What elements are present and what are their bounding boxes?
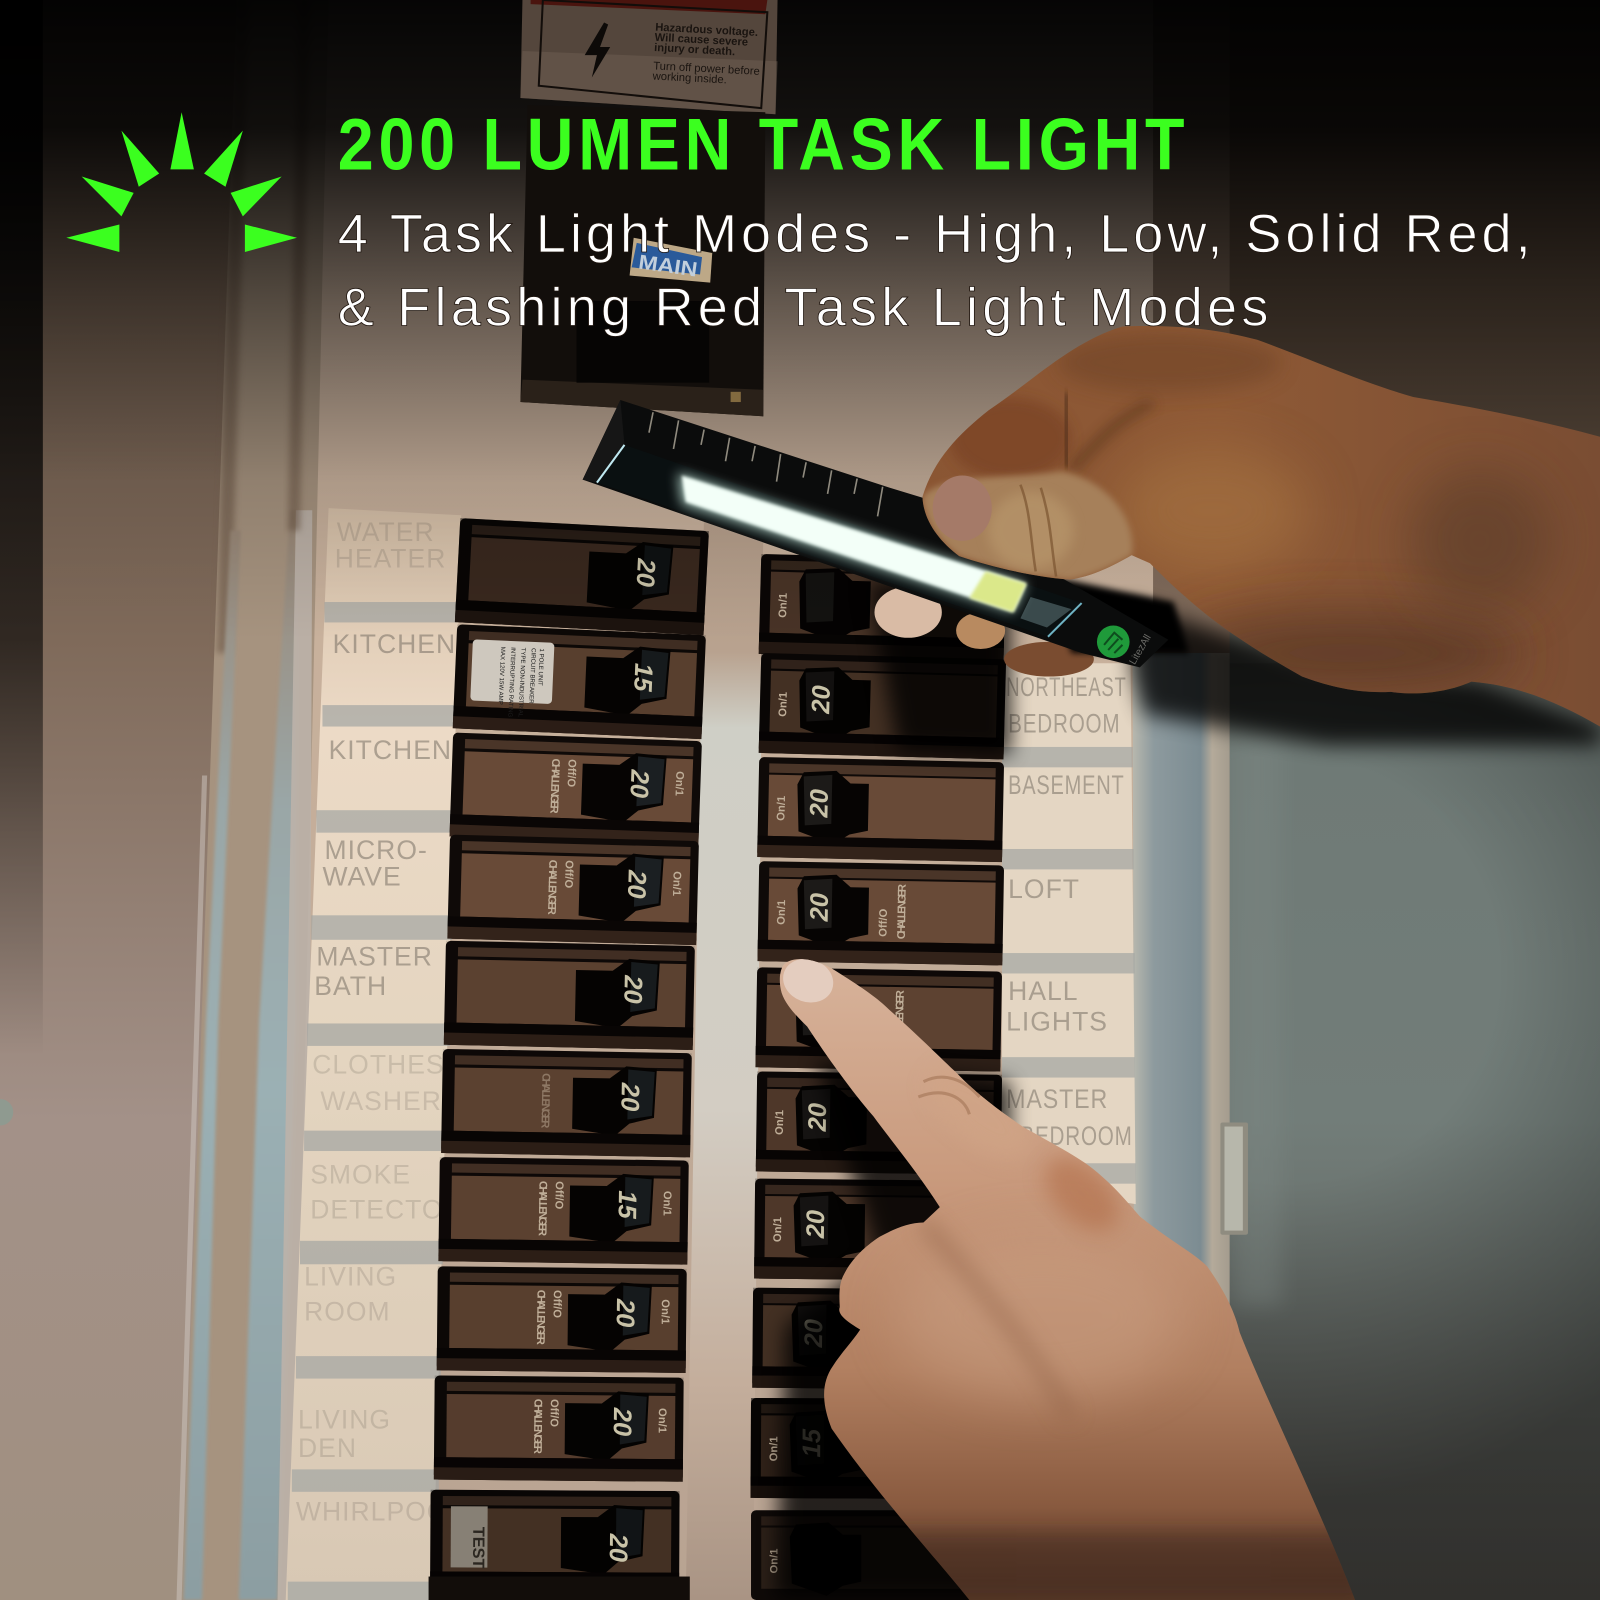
thumb nail [933,476,992,541]
breaker 2: INTERRUPTING RATING [506,647,516,718]
breaker 9: CHALLENGER [531,1399,544,1454]
left breaker column [429,518,709,1600]
breaker 1 [455,518,709,635]
breaker 3: On/1 [673,771,685,796]
left breaker labels: HEATER [335,543,446,573]
breaker 7 [438,1157,689,1265]
palm shadow [1173,610,1520,696]
lens [597,445,1082,637]
flashlight body [583,400,1168,667]
dark groove upper [288,0,310,531]
breaker 2: 1 POLE UNIT [536,648,545,686]
door hinge [1220,1122,1248,1235]
right breaker 8 [752,1288,998,1390]
right breaker 6 [756,1071,1002,1175]
left breaker labels: ROOM [304,1296,391,1326]
yellow end of strip [969,571,1027,612]
left breaker labels: CLOTHES [312,1049,445,1079]
index finger [949,398,1071,480]
LED task light [583,400,1168,667]
warning sign: Turn off power before [653,60,760,78]
right breaker 9: On/1 [768,1436,780,1461]
breaker 8 [437,1266,687,1373]
left breaker labels: WAVE [322,862,402,892]
breaker 7: Off/O [552,1181,565,1210]
breaker 9 [434,1375,684,1482]
left breaker labels: WATER [337,517,435,547]
left breaker labels [286,508,482,1600]
right breaker 7: On/1 [772,1217,784,1242]
thumb [922,471,1132,580]
thumb creases [1020,485,1056,577]
blue highlight strip A [184,531,241,1600]
right breaker 2 [759,653,1006,759]
icon: light burst [66,112,297,252]
breaker 9: Off/O [548,1399,560,1427]
lens reflection [1020,597,1071,628]
breaker 6 [441,1049,692,1157]
breaker 3: 20 [625,768,654,798]
pointing hand [776,949,1367,1600]
right breaker 2: 20 [807,685,836,715]
right breaker 7 [754,1179,1000,1281]
breaker 10 [430,1490,680,1595]
right breaker 5 [755,967,1002,1072]
warning sign [520,0,778,114]
breaker 2: MAX 120V 15W AMP [497,647,506,705]
breaker 4: Off/O [562,860,575,889]
right breaker 3: On/1 [775,796,788,821]
right breaker 4 [757,861,1004,965]
gold speck [731,392,741,402]
left breaker labels: WASHER [320,1086,442,1116]
finger crease [1065,393,1067,467]
breaker 8: Off/O [551,1290,563,1318]
back-of-hand highlight [1124,454,1302,566]
wall screw [0,1099,13,1126]
left breaker labels: WHIRLPOOL [296,1496,464,1526]
breaker 8: 20 [611,1298,639,1327]
right breaker 3: 20 [805,789,834,819]
breaker 4 [447,835,699,945]
breaker 9: 20 [608,1407,636,1436]
breaker 3 [450,733,702,845]
left breaker labels: DETECTORS [310,1194,482,1224]
right breaker column [751,554,1006,1600]
right trim edge [278,510,312,1600]
breaker 7: On/1 [661,1191,673,1216]
right breaker labels: LIGHTS [1006,1007,1108,1037]
left wall margin shadow [0,0,43,1600]
breaker 6: 20 [615,1082,644,1111]
right breaker labels: BEDROOM [1020,1121,1133,1151]
breaker 5 [444,941,695,1050]
breaker 4: On/1 [670,871,683,896]
left breaker labels: MASTER [316,941,433,971]
right breaker 6: On/1 [774,1110,786,1135]
light glow [678,472,1027,612]
subtitle [338,204,1531,338]
breaker 7: CHALLENGER [536,1181,549,1236]
main label plate [630,238,712,283]
thumb highlight [988,492,1073,569]
breaker 10: TEST [469,1527,487,1569]
right breaker 10: On/1 [769,1549,781,1573]
title: 200 LUMEN TASK LIGHT [338,103,1185,185]
breaker 9: On/1 [656,1408,668,1433]
left breaker labels: DEN [298,1433,357,1463]
breaker 4: 20 [622,869,651,899]
left breaker labels: LIVING [304,1262,397,1292]
fingers behind flashlight [874,577,1189,677]
right breaker 5: CHALLENGER [894,990,907,1045]
left breaker labels: MICRO- [324,835,428,865]
breaker 10: 20 [604,1533,632,1562]
right breaker labels: BEDROOM [1008,709,1120,739]
blue highlight strip B [239,510,296,1600]
right breaker labels: LOFT [1008,874,1080,904]
subtitle: 4 Task Light Modes - High, Low, Solid Red, [338,204,1531,264]
right breaker 4: CHALLENGER [896,884,909,939]
right breaker labels: HALL [1008,976,1079,1006]
breaker 2: TYPE NON-INDUSTRIAL [517,647,527,718]
right breaker 6: 20 [804,1103,832,1133]
right breaker 2: On/1 [777,692,790,717]
brand mark: LitezAll [1128,633,1154,667]
box lower ledge [520,380,763,416]
right frame rail [1133,653,1230,1600]
top knuckle shade [1056,332,1281,393]
right breaker labels: MASTER [1006,1084,1108,1114]
main breaker box: MAIN [637,252,699,282]
right breaker labels [1002,663,1136,1204]
breaker 3: Off/O [565,759,578,788]
breaker 3: CHALLENGER [547,758,561,814]
left breaker labels: LIVING [298,1405,391,1435]
right breaker 8: 20 [800,1319,828,1349]
warning sign: Will cause severe [654,32,748,49]
breaker 2 [453,624,706,739]
warning sign: injury or death. [654,42,735,58]
hair blotch [1408,469,1551,612]
left breaker labels: KITCHEN [329,735,452,765]
main label blue field [632,243,702,274]
fingernail [783,959,834,1002]
subtitle: & Flashing Red Task Light Modes [338,278,1268,338]
main breaker box [520,105,765,416]
breaker 5: 20 [618,974,647,1004]
breaker 4: CHALLENGER [545,860,558,915]
left breaker labels: BATH [314,971,387,1001]
logo mark [1104,633,1122,653]
left breaker labels: KITCHEN [333,629,456,659]
LED strip [682,476,1027,612]
left breaker labels: SMOKE [310,1160,411,1190]
right breaker 7: 20 [802,1210,830,1239]
right breaker 10 [751,1510,996,1600]
right breaker 9 [751,1398,996,1499]
centre metal strip [686,510,763,1600]
white edge line [177,776,207,1600]
right breaker 4: Off/O [877,908,890,937]
breaker 6: CHALLENGER [539,1073,551,1128]
breaker 2: 15 [628,662,657,693]
warning sign: Hazardous voltage. [655,22,758,39]
shadow below top hand [1128,602,1600,745]
hand shadows on breakers [776,582,1010,1600]
right breaker 1 [759,554,1006,660]
top hand [908,316,1600,735]
right breaker 1: On/1 [777,593,790,618]
trim base [182,0,329,1600]
right breaker labels: BASEMENT [1008,770,1124,800]
power button logo [1097,626,1130,658]
knuckle wrinkles [918,1077,980,1114]
box inner cover [577,301,709,383]
dark groove [216,0,249,653]
right breaker 9: 15 [798,1428,826,1458]
warning sign: working inside. [651,70,727,86]
right breaker 3 [757,757,1004,862]
ruler ticks [649,412,883,516]
breaker 8: On/1 [659,1299,671,1324]
right breaker 4: On/1 [776,900,788,925]
right breaker labels: NORTHEAST [1006,672,1127,702]
breaker 2: CIRCUIT BREAKER [527,648,537,704]
breaker 1: 20 [631,557,660,588]
right breaker 4: 20 [806,893,834,923]
left door-frame trim [177,0,329,1600]
breaker 7: 15 [613,1190,641,1220]
breaker 8: CHALLENGER [534,1290,547,1345]
